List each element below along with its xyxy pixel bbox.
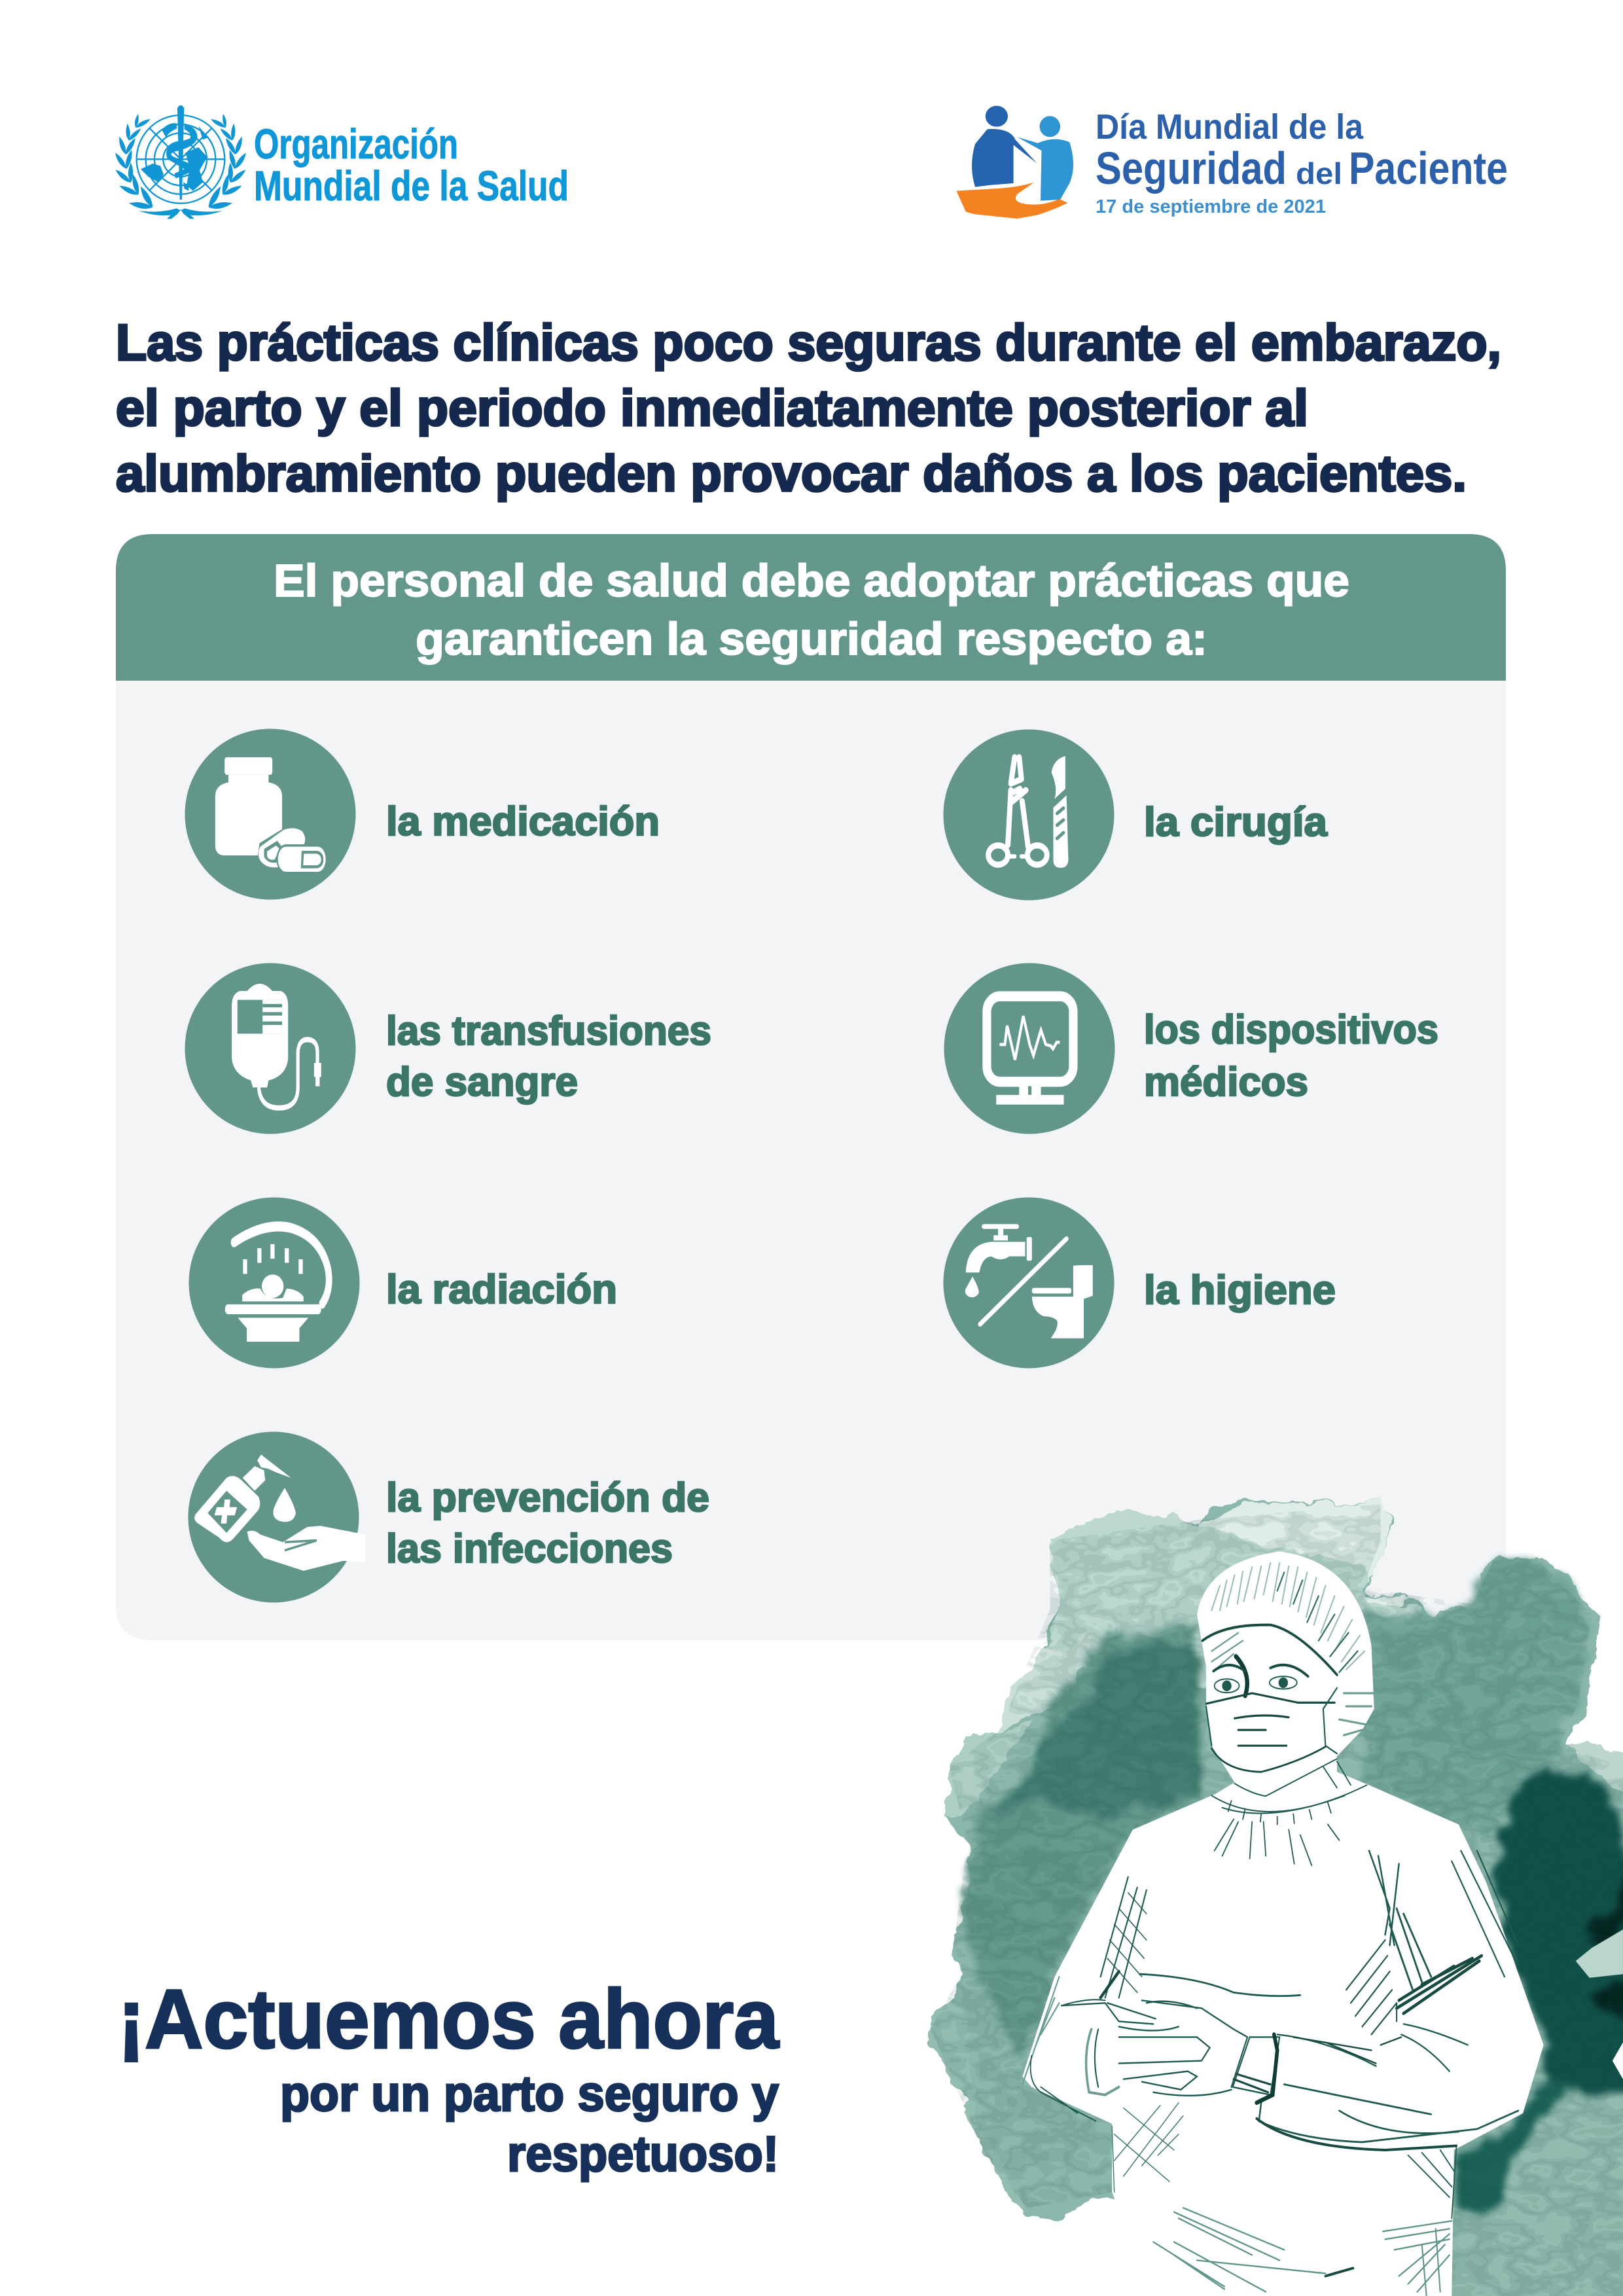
watercolour wash <box>929 1501 1623 2296</box>
figure silhouette <box>1022 1551 1544 2296</box>
label: de sangre <box>386 1060 578 1105</box>
title: el parto y el periodo inmediatamente posterior al <box>116 379 1308 437</box>
label: la cirugía <box>1144 800 1328 845</box>
label: la prevención de <box>386 1475 709 1520</box>
icon: two people and a hand <box>956 106 1073 219</box>
label: la higiene <box>1144 1268 1336 1313</box>
title <box>116 314 1501 502</box>
icon: forceps and scalpel <box>944 729 1114 901</box>
item: la medicación <box>185 729 660 899</box>
logo: Día Mundial de la Seguridad del Paciente <box>956 106 1508 219</box>
label: las transfusiones <box>386 1009 711 1054</box>
label: la medicación <box>386 799 660 844</box>
item: la higiene <box>944 1198 1336 1368</box>
item: la prevención de las infecciones <box>188 1432 709 1602</box>
panel background <box>116 534 1506 1640</box>
panel header: garanticen la seguridad respecto a: <box>416 613 1207 664</box>
item: la radiación <box>188 1198 617 1368</box>
panel header <box>116 534 1506 681</box>
heading: Actuemos ahora: ¡Actuemos ahora <box>118 1973 779 2066</box>
subheading: por un parto seguro y respetuoso <box>280 2066 779 2182</box>
white notches <box>1576 1929 1623 1978</box>
icon: pill bottle and capsules <box>185 729 356 899</box>
label <box>386 1009 711 1105</box>
icon: sanitizer and hand <box>188 1432 365 1602</box>
text: del: del <box>1296 156 1342 190</box>
call to action <box>118 1973 779 2182</box>
illustration: health worker with watercolour wash <box>929 1501 1623 2296</box>
label: las infecciones <box>386 1526 673 1571</box>
label: los dispositivos <box>1144 1007 1438 1052</box>
panel header: El personal de salud debe adoptar prácticas que <box>274 555 1349 606</box>
text: date: 17 de septiembre de 2021 <box>1096 196 1326 217</box>
icon: radiation scanner <box>188 1198 360 1368</box>
text: Paciente: Paciente <box>1349 143 1508 194</box>
icon: heart monitor <box>944 963 1115 1134</box>
label <box>386 1475 709 1571</box>
icon: blood bag <box>185 963 356 1134</box>
item: las transfusiones de sangre <box>185 963 711 1134</box>
icon: tap and toilet <box>944 1198 1114 1368</box>
label: la radiación <box>386 1267 617 1312</box>
health worker figure <box>1022 1551 1544 2296</box>
item: los dispositivos médicos <box>944 963 1438 1134</box>
label <box>1144 1007 1438 1105</box>
title: Las prácticas clínicas poco seguras durante el embarazo, <box>116 314 1501 371</box>
subheading: por un parto seguro y respetuoso: respetuoso! <box>507 2126 779 2182</box>
title: alumbramiento pueden provocar daños a los pacientes. <box>116 444 1467 502</box>
panel: practices <box>116 534 1506 1640</box>
text: Seguridad: Seguridad <box>1096 143 1287 194</box>
label: médicos <box>1144 1060 1308 1105</box>
item: la cirugía <box>944 729 1328 901</box>
logo: Organización Mundial de la Salud <box>113 105 569 219</box>
icon: WHO emblem <box>113 105 248 219</box>
text: Organización: Organización <box>254 120 458 168</box>
gloved hands <box>1061 2000 1401 2103</box>
subheading: por un parto seguro y respetuoso: por un parto seguro y <box>280 2066 779 2122</box>
text: Mundial de la Salud: Mundial de la Salud <box>254 162 569 209</box>
text: Día Mundial de la: Día Mundial de la <box>1096 107 1364 147</box>
hair cap and face lines <box>1202 1563 1374 1796</box>
lap folds <box>1153 2208 1452 2296</box>
gown lines <box>1022 1785 1518 2218</box>
